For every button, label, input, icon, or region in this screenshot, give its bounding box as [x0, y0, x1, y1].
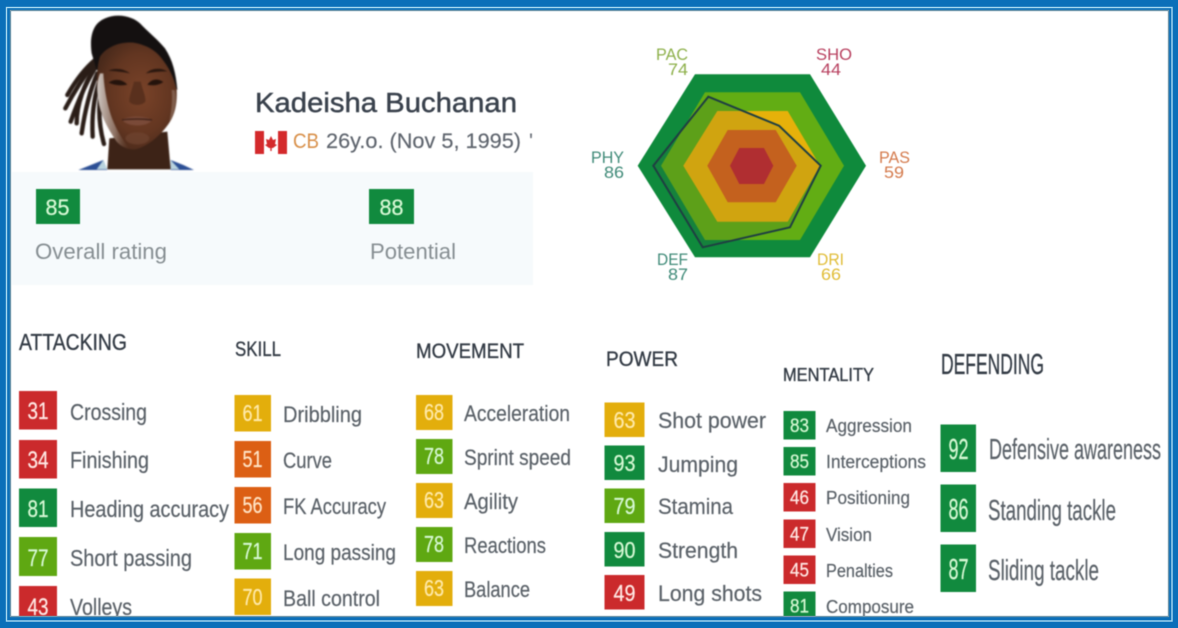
eyebrows: [108, 69, 167, 73]
stat: heading accuracy: 81: [28, 496, 48, 523]
radar label PAS: 59: [884, 164, 904, 182]
panel: movement: [416, 340, 571, 606]
stat: long shots: [604, 575, 762, 610]
stat: sprint speed: [416, 439, 571, 474]
radar label PAC: PAC: [656, 46, 688, 64]
stat: crossing: [19, 391, 147, 430]
stat: strength: Strength: [658, 538, 738, 563]
stat: short passing: 77: [28, 545, 48, 572]
overall rating: Overall rating: [35, 239, 167, 264]
stat: sliding tackle: [940, 544, 1099, 592]
hair bun and cap: [91, 16, 177, 90]
position: CB: [293, 130, 319, 153]
stat: volleys: [19, 586, 132, 622]
stat: standing tackle: [940, 484, 1116, 532]
stat: dribbling: [234, 395, 362, 432]
stat: acceleration: 68: [424, 399, 444, 425]
heading: defending: DEFENDING: [941, 349, 1044, 381]
stat: crossing: 31: [28, 398, 48, 425]
radar label DRI: [817, 251, 844, 284]
radar label PHY: 86: [604, 164, 624, 182]
stat: acceleration: Acceleration: [464, 401, 570, 426]
stat: reactions: 78: [424, 531, 444, 557]
stat: agility: [416, 483, 518, 518]
stat: volleys: Volleys: [70, 594, 132, 620]
stat: jumping: [604, 446, 738, 480]
heading: attacking: ATTACKING: [19, 329, 127, 355]
stat: dribbling: Dribbling: [283, 402, 362, 427]
heading: power: POWER: [606, 348, 678, 371]
stat: sprint speed: 78: [424, 443, 444, 469]
stat: interceptions: 85: [790, 452, 809, 473]
stat: shot power: [604, 402, 766, 437]
panel: mentality: [783, 365, 926, 620]
panel: skill: [234, 338, 396, 615]
stat: stamina: Stamina: [658, 494, 733, 519]
stat: defensive awareness: [940, 424, 1161, 472]
stat: sliding tackle: 87: [948, 554, 968, 586]
stat: penalties: Penalties: [826, 561, 893, 581]
clipped character: ': [529, 130, 533, 153]
stat: fk accuracy: [234, 487, 386, 524]
face: [97, 43, 177, 149]
stat: strength: [604, 532, 738, 566]
hexagon radar chart: [638, 74, 866, 257]
stat: heading accuracy: Heading accuracy: [70, 496, 229, 522]
stat: finishing: 34: [28, 447, 48, 474]
stat: reactions: [416, 527, 546, 562]
radar label PAS: [879, 149, 910, 182]
stat: composure: [784, 592, 914, 620]
lips: [122, 116, 152, 125]
stat: stamina: 79: [614, 493, 636, 519]
stat: strength: 90: [614, 537, 636, 563]
stat: long passing: Long passing: [283, 540, 396, 565]
stat: reactions: Reactions: [464, 533, 546, 558]
nose: [129, 82, 145, 105]
radar label PHY: PHY: [591, 149, 624, 167]
right cheek light: [169, 90, 176, 122]
neck: [107, 132, 171, 169]
stat: positioning: [784, 483, 910, 512]
stat: balance: Balance: [464, 577, 530, 602]
radar label DRI: DRI: [817, 251, 844, 269]
player stat polygon: [653, 97, 821, 247]
radar label PAS: PAS: [879, 149, 910, 167]
stat: balance: 63: [424, 575, 444, 601]
heading: movement: MOVEMENT: [416, 340, 524, 363]
radar label DEF: DEF: [657, 251, 688, 269]
stat: long shots: 49: [614, 580, 636, 606]
stat: composure: Composure: [826, 597, 914, 617]
stat: shot power: 63: [614, 407, 636, 433]
stat: ball control: Ball control: [283, 586, 380, 611]
stat: aggression: Aggression: [826, 416, 912, 436]
radar label SHO: [816, 46, 852, 79]
age and birth date: 26y.o. (Nov 5, 1995): [326, 130, 521, 153]
panel: attacking: [19, 329, 229, 622]
stat: sprint speed: Sprint speed: [464, 445, 571, 470]
stat: positioning: 46: [790, 488, 809, 509]
panel: defending: [940, 349, 1161, 592]
chin highlight: [125, 132, 149, 144]
panel: power: [604, 348, 766, 610]
radar label PHY: [591, 149, 624, 182]
player details line: [255, 130, 533, 154]
stat: fk accuracy: FK Accuracy: [283, 494, 386, 519]
stat: standing tackle: 86: [948, 494, 968, 526]
hair locs: [65, 60, 104, 144]
radar label PAC: 74: [668, 61, 688, 79]
stat: aggression: [784, 411, 912, 440]
stat: ball control: [234, 578, 380, 615]
stat: finishing: Finishing: [70, 447, 149, 473]
potential: [369, 189, 456, 264]
stat: short passing: Short passing: [70, 545, 192, 571]
stat: curve: 51: [242, 446, 262, 472]
stat: curve: Curve: [283, 448, 332, 473]
radar label PAC: [656, 46, 688, 79]
icon: Canadian flag: [255, 131, 287, 154]
stat: interceptions: Interceptions: [826, 452, 926, 472]
stat: curve: [234, 441, 332, 478]
radar label SHO: 44: [821, 61, 841, 79]
heading: skill: SKILL: [235, 338, 281, 361]
stat: sliding tackle: Sliding tackle: [988, 555, 1099, 587]
potential: 88: [380, 195, 404, 220]
radar label DEF: 87: [668, 266, 688, 284]
player name: Kadeisha Buchanan: [255, 87, 517, 118]
stat: jumping: Jumping: [658, 452, 738, 477]
stat: vision: [784, 520, 872, 548]
jersey right: [171, 160, 194, 170]
radar label DEF: [657, 251, 688, 284]
stat: crossing: Crossing: [70, 399, 147, 425]
stat: ball control: 70: [242, 584, 262, 610]
eyes: [109, 79, 163, 85]
stat: positioning: Positioning: [826, 488, 910, 508]
stat: dribbling: 61: [242, 400, 262, 426]
stat: agility: Agility: [464, 489, 518, 514]
stats background panel: [12, 172, 533, 285]
overall rating: 85: [46, 195, 70, 220]
stat: long passing: 71: [242, 538, 262, 564]
stat: agility: 63: [424, 487, 444, 513]
stat: volleys: 43: [28, 594, 48, 621]
stat: composure: 81: [790, 596, 809, 618]
stat: jumping: 93: [614, 450, 636, 476]
overall rating: [35, 189, 167, 264]
stat: short passing: [19, 537, 192, 576]
stat: heading accuracy: [19, 488, 229, 527]
stat: penalties: [784, 556, 893, 584]
radar label DRI: 66: [821, 266, 841, 284]
stat: defensive awareness: 92: [948, 434, 968, 466]
stat: penalties: 45: [790, 560, 809, 582]
stat: fk accuracy: 56: [242, 492, 262, 518]
radar label SHO: SHO: [816, 46, 852, 64]
stat: long passing: [234, 533, 396, 570]
glare on left cheek: [97, 73, 129, 149]
jersey left: [78, 160, 107, 170]
stat: vision: Vision: [826, 525, 872, 545]
stat: balance: [416, 571, 530, 606]
stat: shot power: Shot power: [658, 408, 766, 433]
stat: aggression: 83: [790, 416, 809, 437]
collar: [97, 160, 179, 169]
stat: stamina: [604, 488, 733, 523]
stat: finishing: [19, 440, 149, 478]
stat: acceleration: [416, 395, 570, 430]
heading: mentality: MENTALITY: [783, 365, 874, 385]
stat: long shots: Long shots: [658, 581, 762, 606]
player portrait: [65, 16, 194, 170]
stat: interceptions: [784, 447, 926, 476]
potential: Potential: [370, 239, 456, 264]
stat: vision: 47: [790, 524, 809, 546]
